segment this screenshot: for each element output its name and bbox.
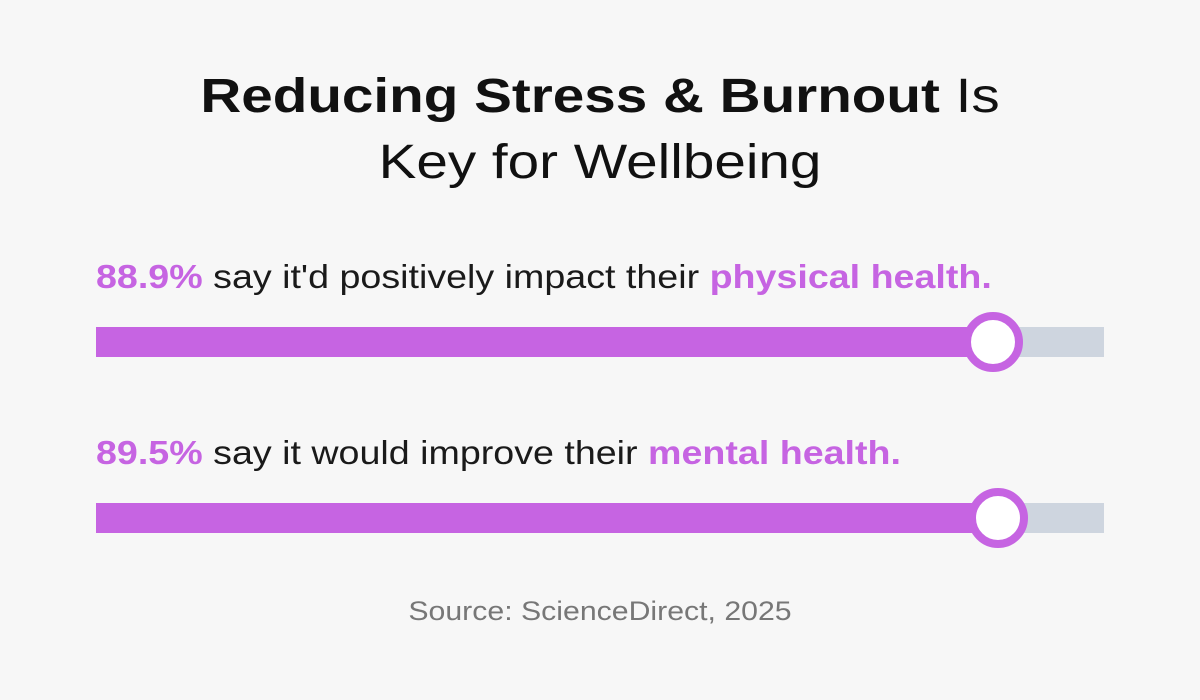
title <box>200 70 1000 189</box>
bar 2 <box>96 503 1104 533</box>
bar 2 knob <box>968 488 1028 548</box>
bar 1 fill <box>96 327 993 357</box>
bar 1 knob <box>963 312 1023 372</box>
stat 1 text: 88.9% say it'd positively impact their physical health. <box>96 258 992 295</box>
title: Reducing Stress & Burnout Is <box>200 70 1000 123</box>
bar 1 <box>96 327 1104 357</box>
stat 2 text: 89.5% say it would improve their mental health. <box>96 434 901 471</box>
title: Key for Wellbeing <box>379 136 821 189</box>
bar 2 fill <box>96 503 998 533</box>
source: Source: ScienceDirect, 2025 <box>408 596 792 626</box>
